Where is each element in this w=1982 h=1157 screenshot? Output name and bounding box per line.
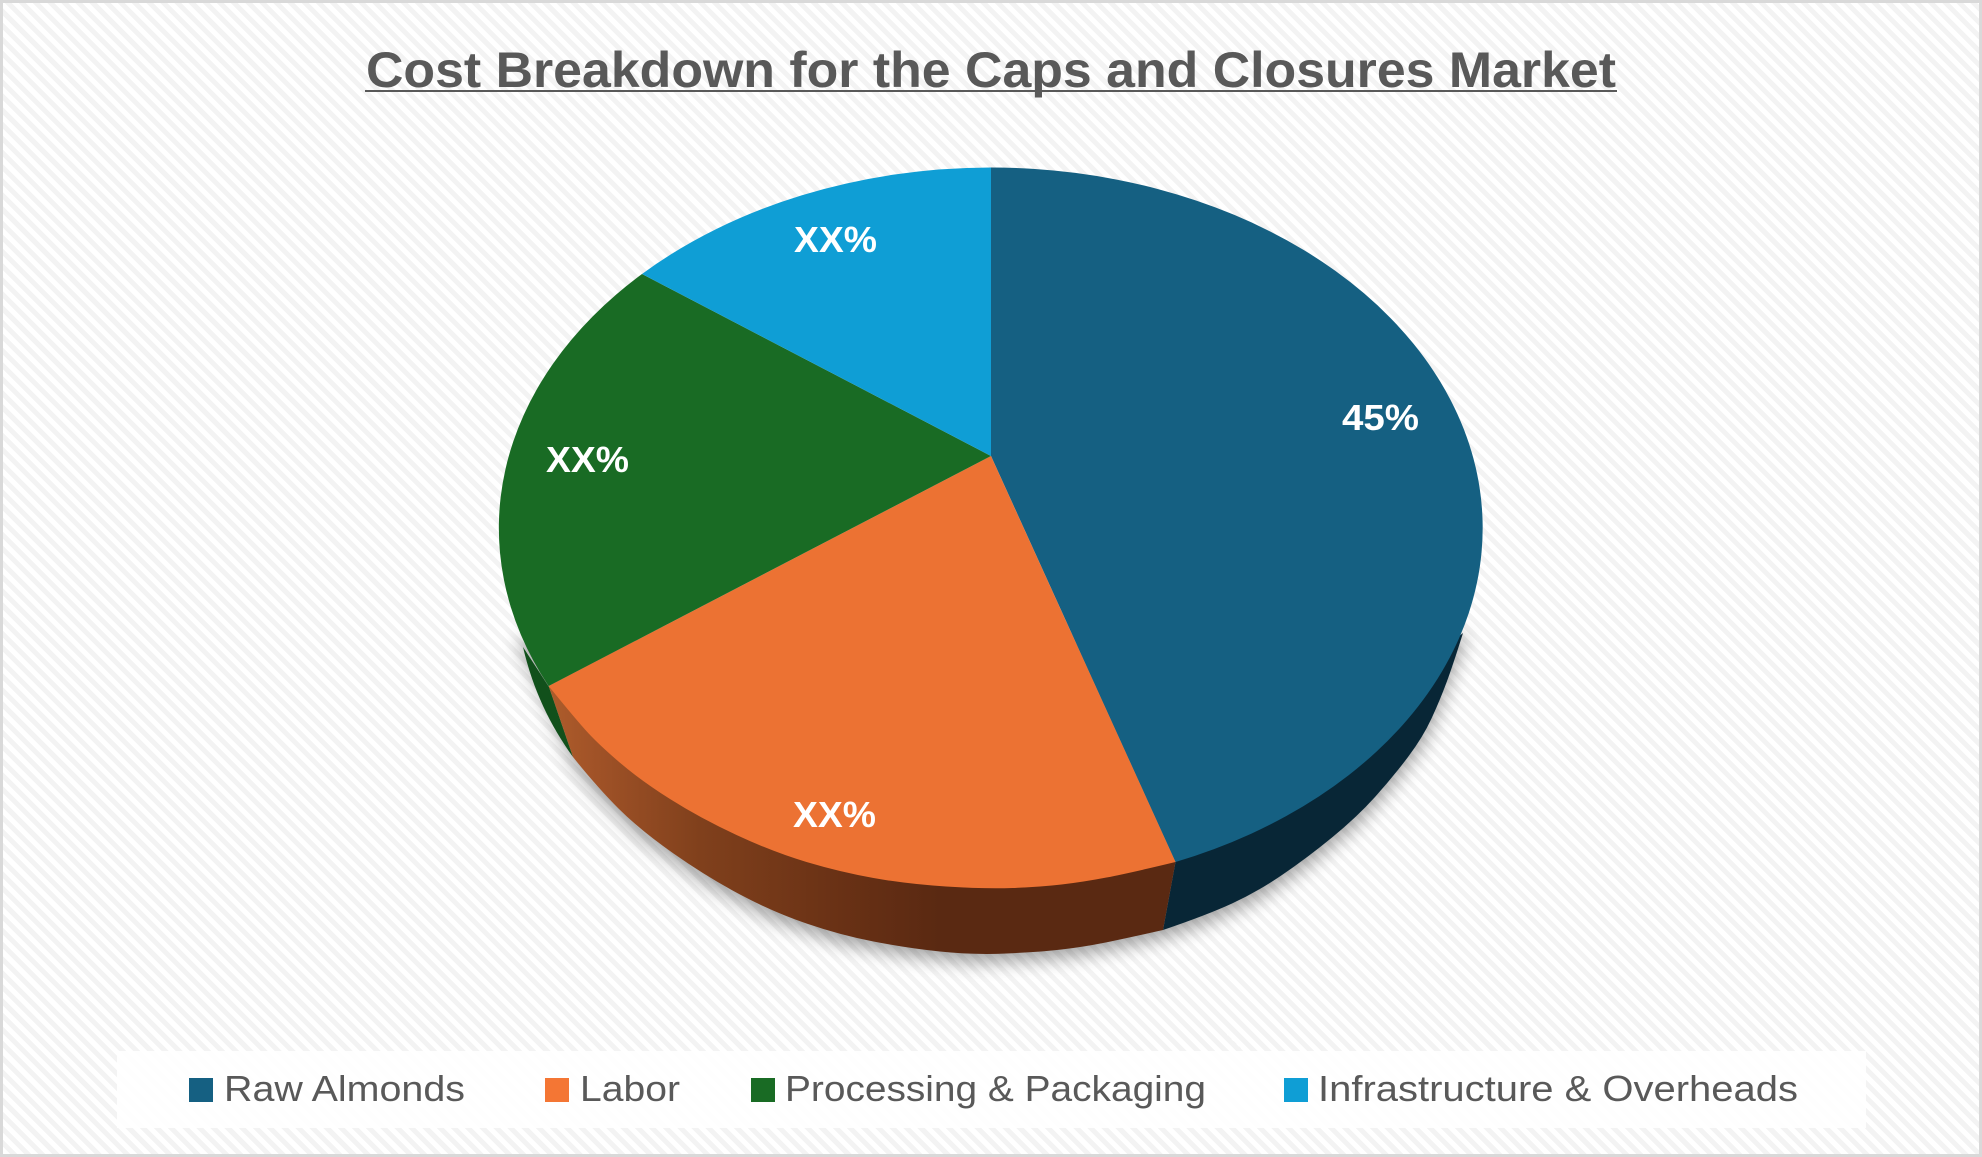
data label: processing and packaging: XX% (546, 439, 629, 480)
pie side: labor (549, 687, 1176, 954)
title: Cost Breakdown for the Caps and Closures Market (366, 42, 1616, 98)
legend item: labor: Labor (580, 1068, 680, 1109)
legend background (117, 1051, 1866, 1128)
pie shadow (517, 635, 1467, 963)
pie side: processing and packaging (523, 647, 573, 757)
slice: infrastructure and overheads (642, 168, 991, 456)
slice: processing and packaging (499, 274, 991, 686)
data label: infrastructure and overheads: XX% (794, 219, 877, 260)
legend item: raw almonds: Raw Almonds (224, 1068, 465, 1109)
pie side: raw almonds (1163, 633, 1463, 930)
slice: raw almonds (991, 168, 1483, 862)
legend item: infrastructure and overheads: Infrastructure & Overheads (1318, 1068, 1798, 1109)
legend item: labor (545, 1068, 680, 1109)
legend (117, 1051, 1866, 1128)
legend item: processing and packaging: Processing & Packaging (785, 1068, 1206, 1109)
data label: labor: XX% (793, 794, 876, 835)
slice: labor (549, 456, 1176, 888)
data label: raw almonds: 45% (1342, 397, 1419, 438)
pie chart (499, 168, 1483, 963)
